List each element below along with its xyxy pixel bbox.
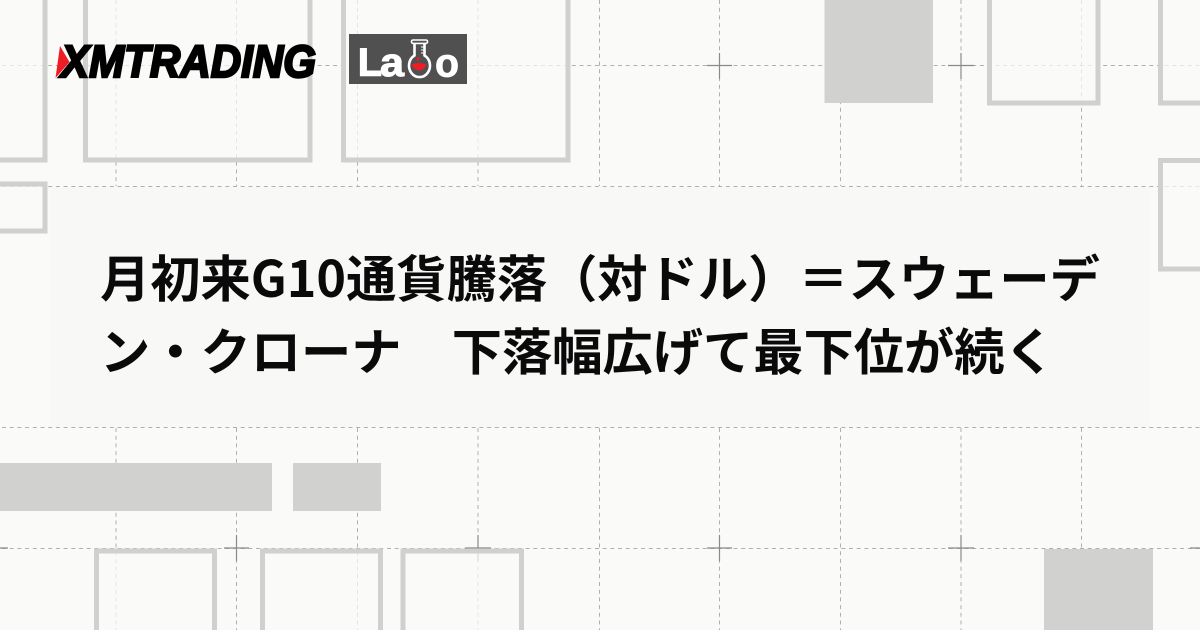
logo: XMTRADING: XMTRADING xyxy=(58,36,316,87)
title: ン・クローナ 下落幅広げて最下位が続く xyxy=(100,313,1055,385)
logo: Labo: o xyxy=(435,42,459,86)
logo: Labo: L xyxy=(358,42,382,84)
title panel xyxy=(50,187,1150,427)
icon: flask xyxy=(409,40,430,77)
title: 月初来G10通貨騰落（対ドル）＝スウェーデ xyxy=(100,240,1100,312)
logo: Labo xyxy=(349,34,467,86)
logo: Labo: a xyxy=(380,41,405,85)
title xyxy=(100,240,1100,385)
